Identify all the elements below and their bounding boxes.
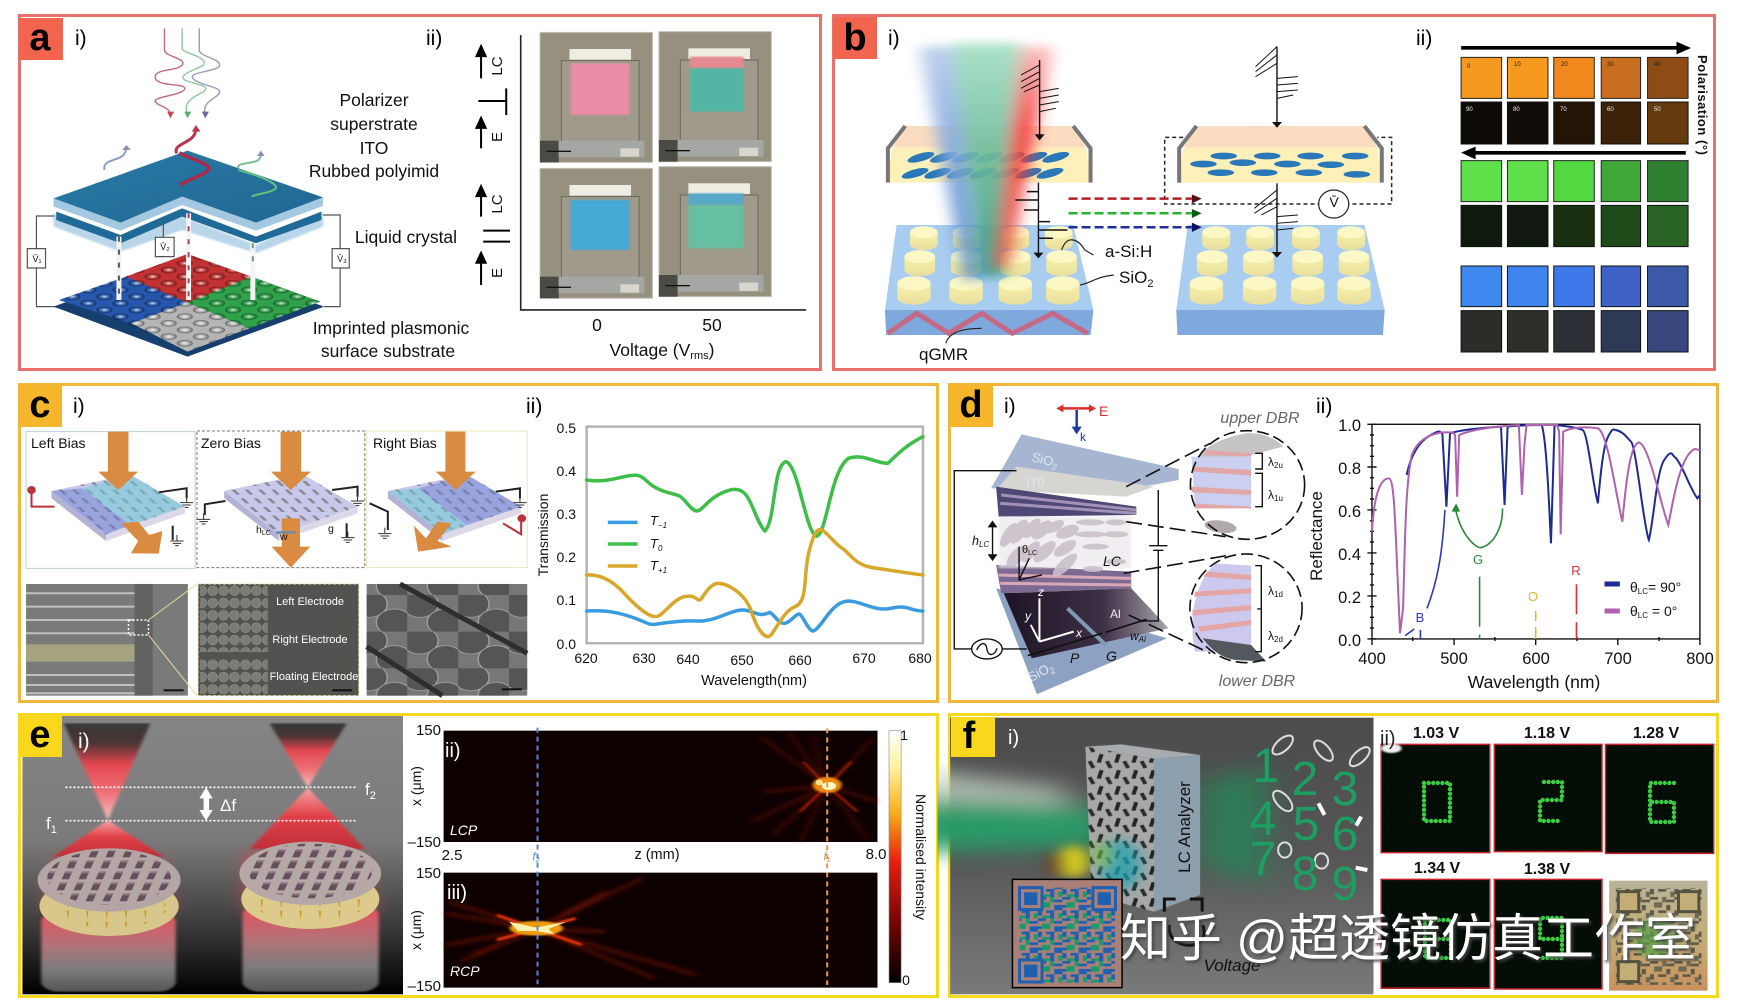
delta f arrow	[199, 787, 213, 821]
circuit wires	[954, 471, 1167, 659]
panel d labels: Al	[1110, 607, 1121, 621]
panel b labels: qGMR	[919, 345, 968, 364]
panel d labels: lower DBR	[1219, 673, 1296, 690]
lower DBR and Al	[996, 565, 1131, 593]
panel f label	[951, 715, 995, 757]
focusing cones	[53, 723, 365, 857]
panel c labels: g	[328, 523, 334, 535]
panel e labels: f	[365, 780, 370, 799]
incoming wavy light	[155, 28, 220, 118]
imprinted substrate	[54, 257, 324, 357]
panel c labels: 650	[730, 652, 754, 668]
panel e labels: 8.0	[866, 846, 886, 863]
left substrate with pillars	[885, 225, 1093, 335]
panel b labels: V̄	[1329, 194, 1339, 210]
panel c labels: 660	[788, 652, 812, 668]
panel c labels: T	[650, 513, 658, 528]
panel d labels: R	[1571, 563, 1581, 578]
green digits: 8	[1292, 848, 1318, 901]
panel c labels: +1	[658, 566, 667, 575]
panel b labels: 10	[1514, 62, 1521, 68]
panel d labels: 2d	[1274, 635, 1283, 644]
panel e labels: z (mm)	[634, 847, 680, 863]
panel e labels: 1	[827, 857, 831, 864]
panel d sub-label ii: ii)	[1316, 395, 1332, 418]
panel d labels: P	[1070, 650, 1080, 666]
panel f sub-label ii: ii)	[1380, 728, 1396, 750]
panel d labels: θ	[1630, 579, 1638, 595]
panel d labels: 700	[1604, 650, 1632, 668]
colour swatches	[1461, 57, 1688, 352]
panel a sub-label ii: ii)	[426, 27, 442, 50]
voltage value labels	[1413, 725, 1679, 878]
panel a labels: Polarizer	[339, 90, 409, 110]
panel e labels: 150	[416, 722, 441, 739]
panel d labels: 0.8	[1338, 460, 1361, 478]
green digits: 4	[1250, 793, 1276, 846]
left liquid crystal cell	[886, 126, 1092, 183]
panel e labels: 1	[51, 824, 57, 836]
panel c labels: 0.0	[557, 636, 576, 652]
panel c labels: T	[650, 558, 658, 573]
illustration: layered plasmonic device	[27, 28, 806, 357]
zero bias	[197, 431, 365, 568]
coordinate axes	[1031, 598, 1074, 642]
panel d labels: 600	[1522, 650, 1550, 668]
panel c labels: 0.4	[557, 463, 576, 479]
panel d labels: x	[1075, 626, 1083, 640]
panel a labels: E	[489, 132, 506, 142]
green digits: 6	[1332, 808, 1358, 861]
panel a label: a	[29, 17, 51, 59]
panel d labels: 2	[1051, 461, 1058, 472]
device photos	[540, 32, 771, 298]
panel c labels: Zero Bias	[201, 435, 261, 451]
reflectance legend lines	[1605, 584, 1620, 611]
right substrate with pillars	[1176, 225, 1385, 335]
panel c labels: Right Electrode	[272, 634, 348, 646]
panel a labels: 50	[702, 315, 722, 335]
hologram digits	[1424, 782, 1674, 958]
panel a labels: Liquid crystal	[355, 227, 457, 247]
panel d label	[949, 384, 993, 427]
green digits: 5	[1293, 798, 1319, 851]
panel f sub-label i: i)	[1008, 727, 1019, 749]
bright corner speck	[1381, 744, 1402, 753]
panel e labels: 150	[416, 865, 441, 882]
panel b labels: 20	[1561, 62, 1568, 68]
panel c labels: 620	[574, 650, 598, 666]
outgoing light	[104, 125, 276, 197]
focal dashed lines	[538, 728, 827, 985]
panel e sub-label i: i)	[78, 730, 90, 753]
ITO	[996, 467, 1154, 497]
panel b sub-label i: i)	[888, 27, 900, 50]
panel a labels: surface substrate	[321, 341, 455, 361]
panel a labels: Imprinted plasmonic	[313, 318, 470, 338]
panel d labels: G	[1106, 648, 1117, 664]
right liquid crystal cell	[1177, 126, 1383, 183]
panel e labels	[46, 722, 929, 995]
panel d labels: Wavelength (nm)	[1468, 672, 1600, 692]
panel e label	[19, 714, 62, 757]
panel d labels: 2	[1048, 665, 1057, 676]
transmission curves	[587, 437, 923, 637]
right bias	[367, 431, 527, 568]
panel c labels: 0.3	[557, 506, 576, 522]
panel e labels: –150	[408, 834, 441, 851]
panel e labels: LCP	[450, 822, 478, 838]
panel a labels	[32, 56, 722, 362]
panel b label: b	[843, 17, 867, 59]
panel a: plasmonic colour display	[19, 16, 820, 370]
panel d: Fabry-Perot reflective device	[949, 384, 1718, 702]
panel b labels: a-Si:H	[1105, 242, 1152, 261]
panel a labels: Voltage (V	[610, 340, 690, 360]
green digits: 7	[1250, 833, 1276, 886]
polarisation indicators	[1268, 733, 1374, 870]
E and k arrows	[1056, 404, 1096, 434]
panel c labels: LC	[262, 530, 271, 537]
RCP heat map	[444, 873, 877, 988]
panel b labels: 90	[1466, 107, 1473, 113]
lower DBR inset	[1190, 554, 1302, 663]
RGB reflected beams	[920, 43, 1053, 280]
panel d labels: = 90°	[1648, 579, 1681, 595]
panel d labels: 1u	[1274, 494, 1283, 503]
panel a labels: V̄₃	[337, 254, 347, 264]
panel d labels: k	[1080, 430, 1087, 444]
P and w arrows	[1028, 619, 1147, 656]
pointer lines	[946, 240, 1114, 343]
panel d labels: B	[1416, 610, 1424, 625]
panel a label	[19, 17, 63, 60]
panel d labels: E	[1099, 403, 1108, 419]
panel a labels: superstrate	[330, 114, 418, 134]
panel c labels: T	[650, 536, 658, 551]
panel a labels: E	[489, 268, 506, 278]
panel c sub-label ii: ii)	[526, 395, 542, 418]
panel c labels: 680	[908, 650, 932, 666]
panel a sub-label i: i)	[75, 27, 87, 50]
panel c labels: 0	[658, 544, 663, 553]
circuit wires and voltage boxes	[27, 215, 349, 307]
panel d labels: LC	[1028, 550, 1037, 557]
green digits: 9	[1332, 858, 1358, 911]
top plate	[54, 151, 323, 223]
panel c labels: Right Bias	[373, 435, 437, 451]
colour bar	[889, 731, 901, 983]
voltage value labels: 1.38 V	[1524, 861, 1570, 878]
panel b labels: 40	[1654, 62, 1661, 68]
panel e labels: –150	[408, 978, 441, 995]
SEM image 3	[367, 584, 527, 696]
panel c labels: 630	[632, 650, 656, 666]
panel d labels	[972, 403, 1714, 692]
panel b: quasi guided mode resonance metasurface	[833, 16, 1714, 370]
voltage value labels: 1.03 V	[1413, 725, 1459, 742]
panel a labels: rms	[690, 350, 709, 362]
panel c label: c	[29, 384, 51, 426]
panel d labels: λ	[1268, 629, 1274, 643]
transmission legend lines	[608, 522, 638, 566]
panel b labels: 50	[1654, 107, 1661, 113]
panel e labels: ii)	[445, 740, 461, 762]
panel b labels: 2	[1147, 278, 1153, 290]
left metalens	[38, 848, 181, 936]
panel c labels: h	[256, 524, 262, 536]
panel d labels: 1.0	[1338, 417, 1361, 435]
panel d labels: 500	[1440, 650, 1468, 668]
left bias	[26, 432, 195, 568]
panel d labels: = 0°	[1648, 603, 1677, 619]
panel a labels: )	[709, 340, 714, 360]
upper DBR	[996, 487, 1136, 517]
panel d labels: LC	[979, 540, 989, 549]
panel d labels: 0.2	[1338, 589, 1361, 607]
panel d labels: θ	[1630, 603, 1638, 619]
panel d labels: G	[1473, 552, 1483, 567]
panel e labels: 2	[535, 857, 540, 864]
panel e labels: x (μm)	[408, 910, 424, 950]
panel a labels: Rubbed polyimid	[309, 161, 439, 181]
panel c: beam steering	[19, 384, 938, 702]
top SiO2	[991, 434, 1179, 488]
liquid crystal molecules	[996, 517, 1131, 579]
illustration: metasurface cells	[885, 42, 1691, 352]
panel b sub-label ii: ii)	[1416, 27, 1432, 50]
voltage value labels: 1.28 V	[1633, 725, 1679, 742]
panel d labels: h	[972, 534, 979, 548]
panel b labels: 0	[1467, 64, 1471, 70]
curve theta 90	[1407, 425, 1700, 543]
panel e labels: Δf	[220, 796, 236, 815]
panel d labels: 0.6	[1338, 503, 1361, 521]
panel c labels: Transmission	[535, 494, 551, 576]
axes	[521, 35, 806, 310]
QR photo	[1609, 881, 1708, 991]
panel c labels: 670	[852, 650, 876, 666]
panel e label: e	[29, 714, 51, 756]
lower beam columns	[41, 905, 379, 992]
panel d labels: 2u	[1274, 461, 1283, 470]
holographic image frames	[1381, 744, 1714, 989]
SEM image 1	[26, 584, 197, 696]
panel d labels: λ	[1268, 584, 1274, 598]
panel c labels: Floating Electrode	[270, 671, 358, 683]
panel b labels: 80	[1513, 107, 1520, 113]
panel d labels: upper DBR	[1220, 410, 1300, 427]
panel d labels: z	[1037, 585, 1044, 599]
polarisation direction arrows	[1461, 42, 1691, 159]
panel a labels: LC	[489, 56, 506, 76]
twisted liquid crystal columns	[119, 213, 253, 300]
panel b labels	[919, 55, 1710, 364]
panel c labels: Left Electrode	[276, 596, 344, 608]
panel d labels: O	[1528, 589, 1538, 604]
panel b labels: Polarisation (°)	[1695, 55, 1710, 155]
panel c labels: −1	[658, 521, 667, 530]
panel d labels: LC	[1638, 587, 1648, 596]
right metalens	[239, 842, 381, 929]
panel a labels: 0	[592, 315, 602, 335]
metalens illustration	[22, 716, 901, 994]
green digits: 2	[1292, 753, 1318, 806]
inset connecting dashes	[1124, 443, 1231, 653]
panel d labels: λ	[1268, 488, 1274, 502]
transmission chart frame	[587, 427, 923, 643]
curve theta 0	[1372, 425, 1700, 633]
panel e labels: f	[824, 851, 827, 863]
dashed colour arrows	[1069, 194, 1202, 232]
reflectance chart frame	[1367, 424, 1700, 645]
green digits: 1	[1253, 740, 1279, 793]
panel d labels: λ	[1268, 455, 1274, 469]
voltage bracket	[1164, 899, 1204, 945]
panel d labels: LC	[1103, 553, 1122, 569]
panel e labels: RCP	[450, 963, 480, 979]
hologram illustration	[909, 718, 1714, 994]
panel b labels: 60	[1607, 107, 1614, 113]
panel d labels: SiO	[1025, 661, 1052, 685]
panel f: meta-hologram display	[909, 714, 1718, 996]
panel d labels: SiO	[1030, 449, 1055, 469]
voltage value labels: 1.18 V	[1524, 725, 1570, 742]
panel c labels	[31, 420, 932, 689]
polarisation arrows	[476, 45, 510, 285]
panel e labels: 2.5	[442, 847, 462, 864]
SEM image 2	[198, 584, 359, 696]
panel d labels: LC	[1638, 611, 1648, 620]
panel e labels: 2	[370, 790, 376, 802]
panel e labels: f	[533, 851, 536, 863]
panel e labels: f	[46, 814, 51, 833]
LCP heat map	[444, 731, 877, 842]
panel c labels: w	[279, 531, 288, 543]
green digits: 3	[1332, 763, 1358, 816]
device stack and DBR insets	[954, 404, 1700, 694]
colour annotations	[1405, 503, 1576, 639]
panel b labels: SiO	[1119, 268, 1147, 287]
panel c label	[19, 384, 62, 427]
panel d labels: w	[1130, 629, 1139, 643]
panel e labels: x (μm)	[408, 766, 424, 806]
lower plate layers	[54, 197, 323, 253]
panel c labels: Wavelength(nm)	[701, 673, 807, 689]
voltage value labels: 1.34 V	[1414, 860, 1460, 877]
panel d labels: θ	[1022, 544, 1028, 556]
panel e labels: 1	[900, 727, 908, 743]
panel c labels: 640	[676, 651, 700, 667]
panel c labels: Left Bias	[31, 435, 85, 451]
focal plane dotted lines	[65, 787, 358, 821]
polarisation arrows and hatching	[1015, 47, 1298, 257]
panel e labels: Normalised intensity	[913, 794, 929, 920]
panel b label	[833, 17, 877, 59]
panel a labels: V̄₁	[32, 254, 42, 264]
QR pattern	[1012, 879, 1122, 988]
bottom SiO2	[996, 588, 1167, 694]
panel d labels: Reflectance	[1307, 491, 1326, 581]
panel d sub-label i: i)	[1004, 395, 1016, 418]
bias schematics and SEM images	[26, 427, 923, 696]
glow	[42, 852, 379, 912]
panel d labels: 1d	[1274, 590, 1283, 599]
panel d labels: 800	[1686, 650, 1714, 668]
panel c labels: 0.2	[557, 549, 576, 565]
panel e labels: 0	[902, 972, 910, 988]
panel c labels: 0.1	[557, 592, 576, 608]
voltage label: Voltage	[1203, 956, 1261, 975]
panel b labels: 70	[1560, 107, 1567, 113]
panel d labels: 0.0	[1338, 632, 1361, 650]
panel a labels: ITO	[360, 138, 388, 158]
metasurface block	[1085, 744, 1200, 912]
panel b labels: 30	[1607, 62, 1614, 68]
panel d label: d	[959, 384, 983, 426]
panel e: bifocal metalens	[19, 714, 938, 996]
green beam	[909, 768, 1266, 885]
panel a labels: V̄₂	[160, 242, 170, 252]
panel d labels: y	[1024, 609, 1032, 623]
panel e labels: iii)	[447, 882, 467, 904]
panel c labels: 0.5	[557, 420, 576, 436]
green digits	[1250, 740, 1358, 911]
voltage circuit	[1165, 137, 1392, 218]
upper DBR inset	[1190, 431, 1305, 539]
watermark: 知乎 @超透镜仿真工作室	[1120, 910, 1696, 967]
panel d labels: 400	[1358, 650, 1386, 668]
panel c sub-label i: i)	[73, 395, 85, 418]
LC Analyzer label: LC Analyzer	[1175, 781, 1194, 873]
panel d labels: IT0	[1026, 475, 1045, 490]
panel a labels: LC	[489, 194, 506, 214]
panel f label: f	[963, 715, 976, 757]
panel d labels: Al	[1138, 635, 1146, 644]
panel d labels: 0.4	[1338, 546, 1361, 564]
